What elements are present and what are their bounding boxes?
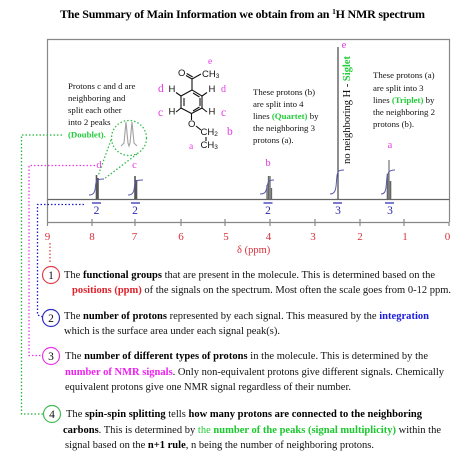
axis numbers: 5 <box>223 231 229 243</box>
molecule structure: 2 <box>214 131 218 138</box>
molecule proton labels: d <box>158 83 164 95</box>
note: doublet: split each other <box>68 105 122 115</box>
peak labels: a <box>388 140 393 151</box>
molecule proton labels: a <box>189 142 194 152</box>
text: item 3: The number of different types of protons in the molecule. This is determined by the <box>65 351 428 362</box>
connector: blue <box>38 204 84 317</box>
integration values: 3 <box>387 205 393 217</box>
integration values <box>92 203 394 217</box>
axis numbers: 8 <box>89 231 95 243</box>
title: 1 <box>332 7 336 16</box>
axis numbers: 3 <box>310 231 316 243</box>
molecule proton labels: c <box>221 107 226 119</box>
peak labels <box>96 40 393 171</box>
text: item 2: which is the surface area under each signal peak(s). <box>64 326 280 337</box>
note: quartet: are split into 4 <box>253 99 304 109</box>
molecule structure: O <box>188 119 195 130</box>
text: item 1: The functional groups that are present in the molecule. This is determined based on the <box>64 270 435 281</box>
text: item 1: positions (ppm) of the signals on the spectrum. Most often the scale goes from 0-12 ppm. <box>72 285 451 296</box>
integration values: 2 <box>94 205 100 217</box>
axis numbers: 1 <box>402 231 408 243</box>
integration values: 2 <box>132 205 138 217</box>
note: triplet: the neighboring 2 <box>373 107 435 117</box>
molecule structure: 3 <box>214 144 218 151</box>
text: item 4 <box>63 409 441 451</box>
integration values: 3 <box>335 205 341 217</box>
molecule structure: H <box>208 84 216 95</box>
title: The Summary of Main Information we obtain from an <box>60 7 329 21</box>
molecule proton labels: d <box>221 84 226 95</box>
text: item 2 <box>64 311 429 337</box>
molecule structure: CH <box>202 69 216 80</box>
badge 3 <box>42 348 60 364</box>
note: quartet: the neighboring 3 <box>253 123 316 133</box>
note: triplet: are split into 3 <box>373 83 424 93</box>
text: item 2: The number of protons represented by each signal. This measured by the integration <box>64 311 429 322</box>
note: quartet: lines <box>253 111 272 121</box>
peak labels: c <box>132 160 137 171</box>
axis numbers: 6 <box>178 231 184 243</box>
molecule proton labels <box>158 57 233 152</box>
text: item 3: equivalent protons give one NMR signal regardless of their number. <box>65 382 351 393</box>
connector: magenta <box>29 166 95 356</box>
note: quartet: (Quartet) by <box>272 111 318 121</box>
peak labels: d <box>96 160 102 171</box>
note: quartet: protons (a). <box>253 135 294 145</box>
axis numbers <box>45 231 451 243</box>
molecule structure: O <box>178 68 185 79</box>
integration values: 2 <box>265 205 271 217</box>
badge 3: 3 <box>48 351 54 363</box>
axis title: δ (ppm) <box>237 245 271 256</box>
note: triplet: (Triplet) by <box>392 95 434 105</box>
text: item 1 <box>64 270 451 296</box>
axis numbers: 9 <box>45 231 51 243</box>
title: H NMR spectrum <box>336 7 425 21</box>
note: doublet: (Doublet). <box>68 130 106 140</box>
peaks <box>96 47 390 199</box>
badge 4: 4 <box>49 409 55 421</box>
peak labels: b <box>265 158 271 169</box>
badge 2 <box>42 310 60 326</box>
molecule proton labels: e <box>208 57 212 67</box>
doublet magnifier <box>98 120 146 179</box>
spectrum frame and axis <box>48 40 450 226</box>
axis numbers: 0 <box>445 231 451 243</box>
molecule structure: 3 <box>216 73 220 80</box>
note: doublet: neighboring and <box>68 93 126 103</box>
badge 2: 2 <box>48 313 54 325</box>
note: triplet: lines <box>373 95 392 105</box>
integration curves <box>89 170 395 195</box>
note: triplet: These protons (a) <box>373 70 435 80</box>
badge 1: 1 <box>48 270 54 282</box>
molecule proton labels: c <box>158 107 163 119</box>
note: quartet: These protons (b) <box>253 87 315 97</box>
badge 1 <box>42 266 60 284</box>
axis numbers: 2 <box>357 231 363 243</box>
molecule structure: H <box>208 106 216 118</box>
molecule structure: CH <box>200 140 214 151</box>
text: item 4: The spin-spin splitting tells how many protons are connected to the neighboring <box>66 409 423 420</box>
peak labels: e <box>342 40 347 51</box>
connector: red <box>49 243 51 263</box>
molecule proton labels: b <box>227 126 233 138</box>
badge 4 <box>44 406 60 422</box>
molecule structure: H <box>168 106 176 118</box>
molecule structure <box>168 68 220 151</box>
note: singlet, rotated: no neighboring H - Siglet <box>341 56 353 164</box>
text: item 4: signal based on the n+1 rule, n being the number of neighboring protons. <box>65 440 374 451</box>
molecule structure: CH <box>200 127 214 138</box>
connector: green <box>22 135 62 414</box>
molecule structure: H <box>168 84 176 95</box>
axis numbers: 4 <box>266 231 272 243</box>
axis numbers: 7 <box>132 231 138 243</box>
note: doublet: Protons c and d are <box>68 81 136 91</box>
note: triplet: protons (b). <box>373 119 414 129</box>
text: item 3 <box>65 351 445 393</box>
note: doublet: into 2 peaks <box>68 117 111 127</box>
text: item 4: carbons. This is determined by the number of the peaks (signal multiplicity) within the <box>63 425 441 436</box>
text: item 3: number of NMR signals. Only non-equivalent protons give different signals. Chemically <box>65 367 445 378</box>
